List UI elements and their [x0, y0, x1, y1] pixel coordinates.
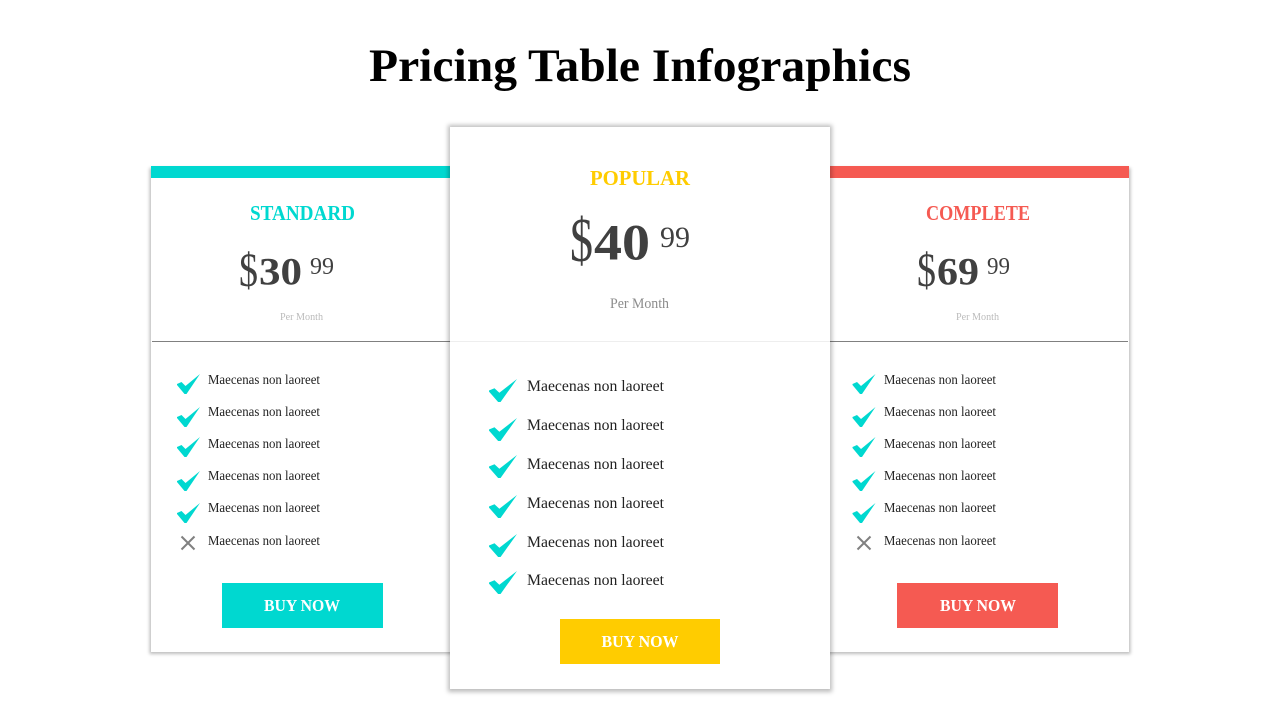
complete price: 69 [937, 250, 979, 294]
popular feature list: Maecenas non laoreet [527, 495, 665, 512]
standard feature list: Maecenas non laoreet [208, 404, 320, 419]
complete feature list [852, 372, 996, 550]
complete button: BUY NOW [940, 596, 1016, 615]
standard heading: STANDARD [250, 201, 355, 225]
popular price: 40 [594, 216, 650, 272]
standard price: 30 [259, 250, 302, 294]
standard price [239, 244, 334, 297]
complete feature list: Maecenas non laoreet [884, 372, 996, 387]
standard feature list: Maecenas non laoreet [208, 468, 320, 483]
standard feature list: Maecenas non laoreet [208, 436, 320, 451]
popular per month: Per Month [610, 296, 669, 312]
popular feature list: Maecenas non laoreet [527, 572, 665, 589]
standard price: $ [239, 244, 258, 297]
standard feature list: Maecenas non laoreet [208, 500, 320, 515]
complete top bar [819, 166, 1129, 178]
panel: popular [448, 125, 832, 692]
complete heading: COMPLETE [926, 201, 1030, 225]
standard per month: Per Month [280, 311, 323, 323]
standard feature list [177, 372, 320, 550]
popular feature list [489, 378, 665, 594]
standard feature list: Maecenas non laoreet [208, 372, 320, 387]
complete per month: Per Month [956, 311, 999, 323]
popular feature list: Maecenas non laoreet [527, 378, 665, 395]
panel: complete [818, 166, 1130, 654]
standard button [222, 583, 383, 628]
standard top bar [151, 166, 461, 178]
complete price: 99 [987, 254, 1010, 280]
popular button: BUY NOW [602, 632, 678, 651]
popular price: $ [570, 207, 593, 275]
popular feature list: Maecenas non laoreet [527, 456, 665, 473]
complete price: $ [917, 244, 936, 297]
complete price [917, 244, 1010, 297]
standard button: BUY NOW [264, 596, 340, 615]
standard feature list: Maecenas non laoreet [208, 533, 320, 548]
complete feature list: Maecenas non laoreet [884, 533, 996, 548]
panel: standard [150, 166, 462, 654]
complete feature list: Maecenas non laoreet [884, 500, 996, 515]
complete feature list: Maecenas non laoreet [884, 468, 996, 483]
standard price: 99 [310, 254, 334, 280]
popular heading: POPULAR [590, 166, 691, 190]
complete feature list: Maecenas non laoreet [884, 436, 996, 451]
title: Pricing Table Infographics [369, 40, 911, 92]
popular feature list: Maecenas non laoreet [527, 534, 665, 551]
popular feature list: Maecenas non laoreet [527, 417, 665, 434]
popular button [560, 619, 720, 664]
complete button [897, 583, 1058, 628]
complete feature list: Maecenas non laoreet [884, 404, 996, 419]
popular price: 99 [660, 221, 690, 254]
popular price [570, 207, 690, 275]
